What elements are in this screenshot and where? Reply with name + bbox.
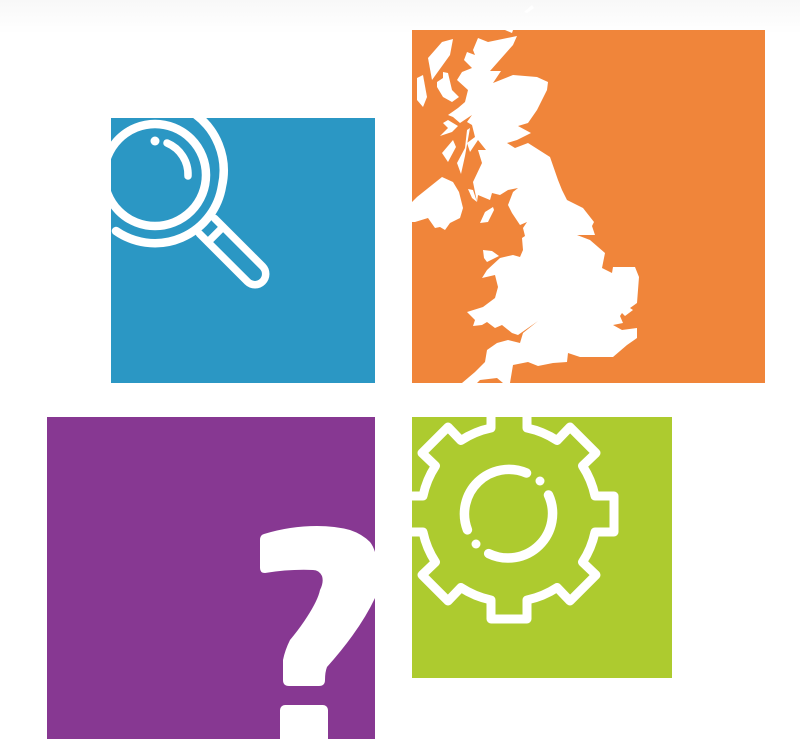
- panel: question (purple tile): [47, 417, 378, 750]
- icon: question mark: [260, 526, 378, 750]
- icon: gear with cycle arrows: [404, 409, 614, 619]
- map: Scottish islands: [417, 30, 513, 202]
- map: Ireland: [412, 177, 463, 230]
- map: Anglesey: [483, 250, 499, 262]
- panel: search (blue tile): [104, 112, 375, 383]
- icon: magnifying glass: [104, 112, 266, 285]
- map: United Kingdom and Ireland: [412, 30, 639, 383]
- map: Isle of Man: [480, 207, 494, 223]
- panel: UK map (orange tile): [412, 30, 765, 383]
- panel: process (green tile): [404, 409, 672, 678]
